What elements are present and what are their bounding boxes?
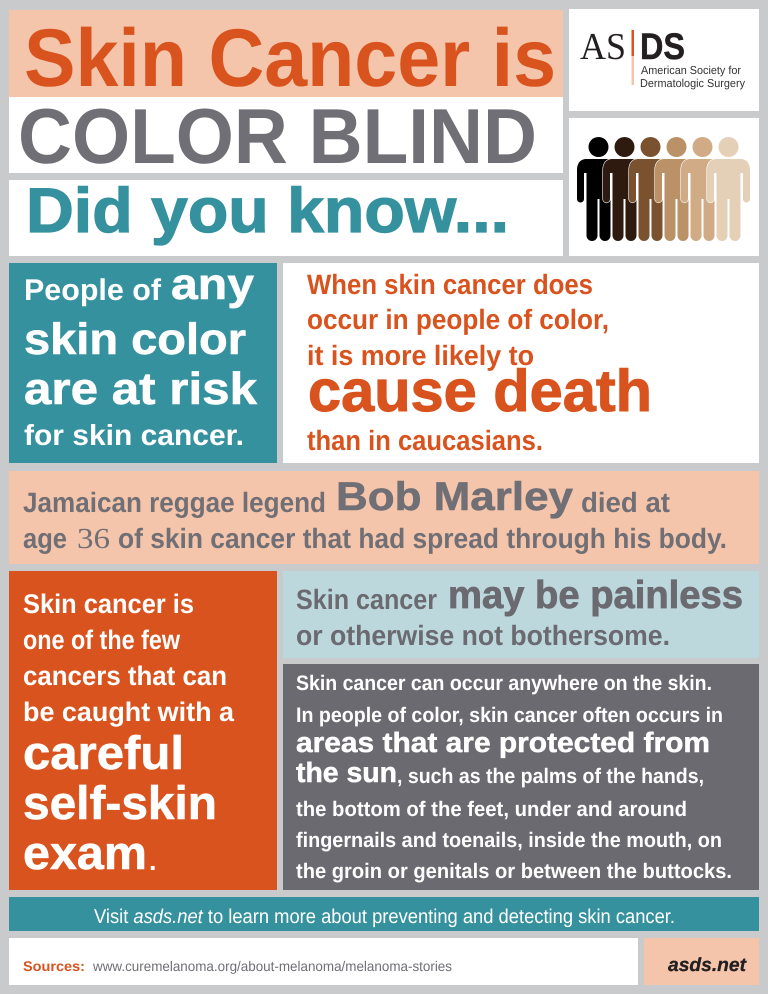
text: people of any [24,260,255,309]
icon: person light tan [681,137,724,241]
text: fingernails and toenails: fingernails and toenails, inside the mouth, on [296,829,722,852]
panel: asds.net [644,938,759,985]
banner text: Visit asds.net to learn more about preventing and detecting skin cancer. [94,906,675,928]
text: skin cancer may be painless [296,574,743,617]
text: groin or genitals: the groin or genitals or between the buttocks. [296,860,732,883]
text: be caught with a: be caught with a [23,697,235,727]
panel: title skin cancer is [9,10,563,104]
banner: visit asds.net [9,897,759,931]
panel: any skin color [9,260,277,463]
text: exam: exam [23,826,147,879]
text: skin color: skin color [24,315,246,364]
text: anywhere on the skin: Skin cancer can occur anywhere on the skin. [296,672,712,695]
heading: color blind: COLOR BLIND [18,92,537,180]
text: first line: Jamaican reggae legend [23,487,326,518]
text: are at risk: are at risk [24,363,258,414]
text: cause death: cause death [308,358,652,424]
text: bottom of the feet: the bottom of the feet, under and around [296,798,687,821]
icon: person black [577,137,620,241]
logo name: Dermatologic Surgery [640,78,745,90]
sources label: Sources: [23,958,85,974]
text: one of the few: one of the few [23,625,181,655]
icon: person pale [707,137,750,241]
text: skin cancer may be painless: may be painless [448,574,743,617]
text: skin cancer is: Skin cancer is [23,589,194,619]
logo mark: DS: DS [640,26,685,67]
logo name: American Society for [641,65,741,77]
text: the sun such as palms: the sun [296,757,397,788]
text: the sun such as palms [296,757,704,788]
text: self-skin: self-skin [23,776,217,829]
panel: areas protected from the sun [283,664,759,890]
text: skin cancer may be painless: Skin cancer [296,584,437,615]
panel: ASDS logo [569,9,759,111]
text: first line: died at [581,487,670,518]
icon: person tan [655,137,698,241]
text: second line: age [23,523,67,554]
text: areas that are protected from: areas that are protected from [296,727,710,758]
text: cancers that can: cancers that can [23,661,227,691]
text: or otherwise not bothersome: or otherwise not bothersome. [296,620,670,651]
text: than in caucasians: than in caucasians. [307,425,543,456]
text: it is more likely to: it is more likely to [307,340,534,371]
panel: bob marley [9,471,759,564]
icon: person dark brown [603,137,646,241]
sources url: www.curemelanoma.org/about-melanoma/melanoma-stories [92,958,452,974]
heading: did you know: Did you know... [26,176,509,246]
text: first line: Bob Marley [336,475,574,519]
logo divider [632,30,634,85]
logo name [640,65,745,90]
website label: asds.net [668,955,747,976]
text: occur in people of color: occur in people of color, [307,304,609,335]
logo mark: AS: AS [580,26,626,68]
heading: skin cancer is: Skin Cancer is [24,13,556,104]
panel: sources [9,938,638,985]
text: first line [23,475,670,519]
text: people of any: People of [24,274,162,307]
text: second line: 36 [77,523,110,555]
text: careful: careful [23,726,184,779]
text: people of any: any [171,260,255,309]
text: people of color: In people of color, skin cancer often occurs in [296,704,723,727]
panel: row of people [569,118,759,256]
text: exam: . [149,846,157,876]
text: second line: of skin cancer that had spread through his body. [118,523,727,554]
panel: did you know [9,176,563,256]
text: for skin cancer: for skin cancer. [24,420,244,452]
panel: title color blind [9,92,563,180]
text: when skin cancer does: When skin cancer does [307,269,593,300]
panel: may be painless [283,571,759,658]
panel: self-skin exam [9,571,277,890]
text: the sun such as palms: , such as the palms of the hands, [397,765,704,788]
icon: person brown [629,137,672,241]
panel: cause death [283,263,759,463]
